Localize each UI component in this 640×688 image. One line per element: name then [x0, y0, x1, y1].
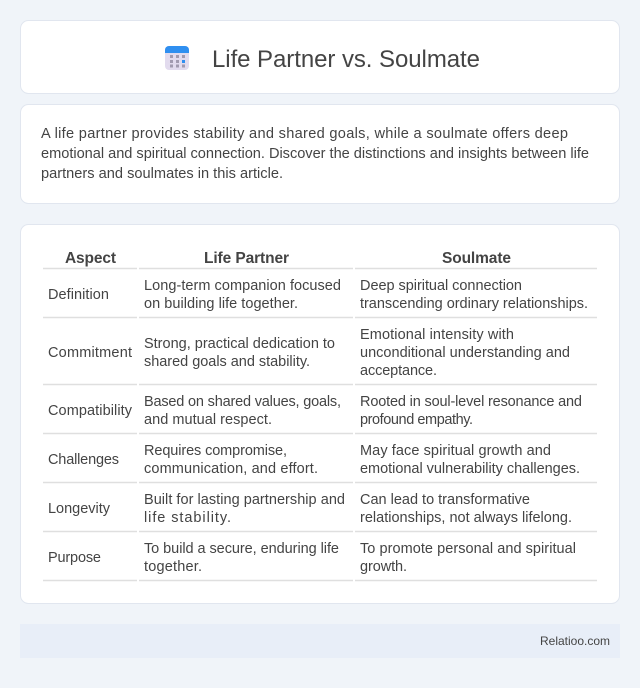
- footer: [20, 624, 620, 658]
- row: Definition: on building life together.: [144, 296, 298, 312]
- row: Longevity: Can lead to transformative: [360, 492, 530, 508]
- row: Purpose: To build a secure, enduring life: [144, 541, 339, 557]
- table header: Aspect: [65, 250, 116, 267]
- row: Definition: Long-term companion focused: [144, 278, 341, 294]
- row: Challenges: Challenges: [48, 452, 119, 468]
- row: Compatibility: Based on shared values, goals,: [144, 394, 341, 410]
- intro text: [41, 126, 589, 182]
- row: Longevity: life stability.: [144, 510, 231, 526]
- row: Purpose: To promote personal and spiritual: [360, 541, 576, 557]
- row: Definition: Deep spiritual connection: [360, 278, 522, 294]
- row: Definition: [48, 278, 588, 312]
- row: Compatibility: profound empathy.: [360, 412, 473, 428]
- table header: Life Partner: [204, 250, 289, 267]
- row: Challenges: Requires compromise,: [144, 443, 287, 459]
- table header: [65, 250, 511, 267]
- row: Compatibility: Compatibility: [48, 403, 133, 419]
- row: Challenges: communication, and effort.: [144, 461, 318, 477]
- row: Purpose: Purpose: [48, 550, 101, 566]
- row: Commitment: Strong, practical dedication to: [144, 336, 335, 352]
- footer: Relatioo.com: [540, 634, 610, 648]
- row: Challenges: May face spiritual growth and: [360, 443, 551, 459]
- row: Longevity: [48, 492, 572, 526]
- icon: calendar: [165, 46, 189, 70]
- row: Commitment: Commitment: [48, 345, 132, 361]
- intro text: emotional and spiritual connection. Discover the distinctions and insights between life: [41, 146, 589, 162]
- row: Commitment: acceptance.: [360, 363, 437, 379]
- row: Purpose: together.: [144, 559, 202, 575]
- row: Commitment: Emotional intensity with: [360, 327, 514, 343]
- row: Purpose: growth.: [360, 559, 407, 575]
- row: Compatibility: [48, 394, 582, 428]
- table header: Soulmate: [442, 250, 511, 267]
- row: Challenges: emotional vulnerability challenges.: [360, 461, 580, 477]
- row: Longevity: Built for lasting partnership and: [144, 492, 345, 508]
- intro text: partners and soulmates in this article.: [41, 166, 283, 182]
- row: Longevity: Longevity: [48, 501, 111, 517]
- row: Longevity: relationships, not always lifelong.: [360, 510, 572, 526]
- row: Commitment: shared goals and stability.: [144, 354, 310, 370]
- title: Life Partner vs. Soulmate: [212, 46, 480, 73]
- row: Compatibility: and mutual respect.: [144, 412, 272, 428]
- title panel: [20, 20, 620, 94]
- row: Commitment: unconditional understanding and: [360, 345, 570, 361]
- row: Challenges: [48, 443, 580, 477]
- row: Compatibility: Rooted in soul-level resonance and: [360, 394, 582, 410]
- panel: introduction: [20, 104, 620, 204]
- intro text: A life partner provides stability and shared goals, while a soulmate offers deep: [41, 126, 568, 142]
- panel: comparison table: [20, 224, 620, 604]
- row: Commitment: [48, 327, 570, 379]
- row: Definition: transcending ordinary relationships.: [360, 296, 588, 312]
- row: Purpose: [48, 541, 576, 575]
- row: Definition: Definition: [48, 287, 109, 303]
